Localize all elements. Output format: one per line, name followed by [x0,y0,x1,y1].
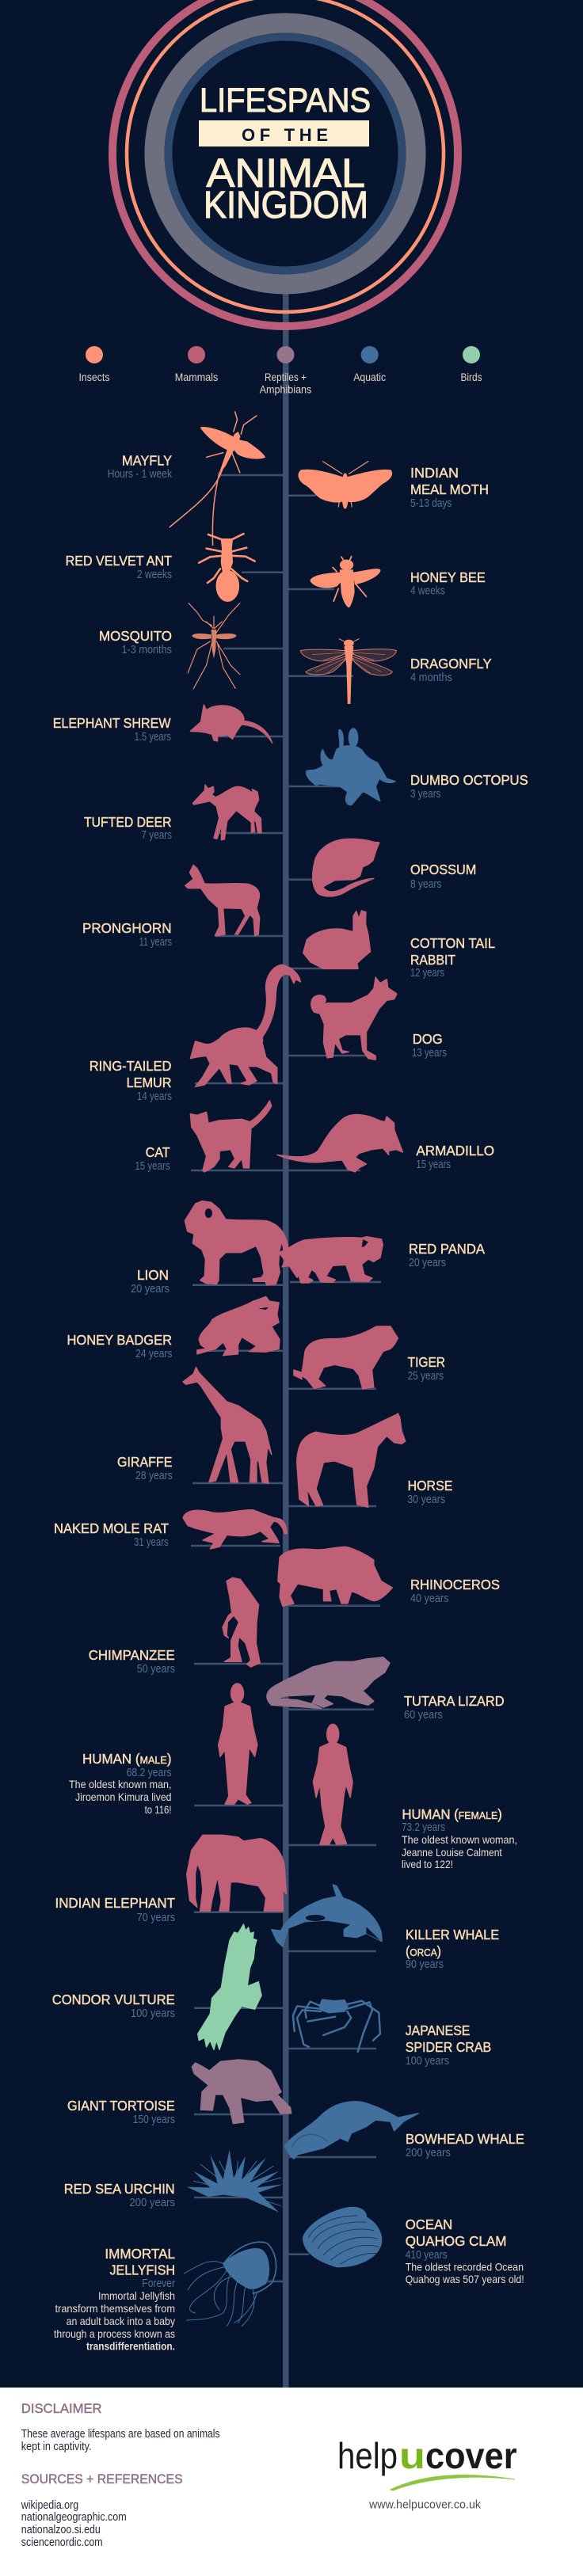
entry: tiger [288,1326,445,1389]
legend: Reptiles + [265,371,307,383]
label: immortal jellyfish: transdifferentiation. [86,2339,175,2352]
icon: honey bee [311,557,380,607]
entry: ring-tailed lemur [90,965,300,1103]
entry: dumbo octopus [288,729,528,805]
label: pronghorn: PRONGHORN [82,920,171,936]
label: ring-tailed lemur: RING-TAILED [90,1058,172,1074]
label: tiger: 25 years [408,1370,444,1383]
label: naked mole rat [54,1520,169,1549]
icon: japanese spider crab [293,2000,380,2052]
label: bowhead whale [406,2131,524,2159]
label: red velvet ant [66,553,172,581]
title: LIFESPANS [200,82,371,120]
label: bowhead whale: 200 years [406,2147,451,2159]
icon: horse [297,1414,406,1507]
label: red sea urchin: 200 years [129,2197,175,2209]
label: human female: 73.2 years [402,1821,445,1834]
label: cotton tail rabbit: RABBIT [410,952,455,968]
entry: mayfly [108,412,284,545]
label: giraffe: GIRAFFE [117,1454,172,1470]
label: ring-tailed lemur: LEMUR [127,1075,171,1090]
legend [79,346,482,396]
label: tutara lizard [404,1693,505,1722]
icon: human male [219,1684,257,1804]
label: tufted deer [84,814,172,842]
label: mosquito [99,628,172,656]
disclaimer: These average lifespans are based on animals [21,2428,219,2441]
label: dog: DOG [413,1031,443,1047]
label: tutara lizard: TUTARA LIZARD [404,1693,505,1709]
icon: pronghorn [185,865,260,936]
label: dragonfly [410,656,492,684]
entry: dog [288,977,447,1060]
icon: cotton tail rabbit [303,911,371,968]
icon: indian meal moth [299,462,391,508]
entry: honey badger [67,1296,284,1360]
legend: Insects [79,371,109,383]
entry: cat [135,1101,284,1173]
label: giant tortoise [67,2098,175,2126]
label: indian meal moth: INDIAN [410,465,459,481]
entry: naked mole rat [54,1510,287,1549]
label: killer whale: KILLER WHALE [406,1927,499,1942]
label: rhinoceros: 40 years [410,1592,448,1605]
entry: mosquito [99,603,284,689]
icon: giraffe [183,1368,272,1483]
label: lion: 20 years [131,1283,170,1296]
label: red panda: 20 years [409,1257,446,1269]
website url: www.helpucover.co.uk [368,2498,481,2512]
label: indian meal moth: MEAL MOTH [410,481,489,497]
entry: horse [288,1414,452,1507]
label: naked mole rat: 31 years [134,1536,169,1549]
label: immortal jellyfish: an adult back into a baby [67,2315,175,2327]
icon: ring-tailed lemur [190,965,300,1086]
icon: chimpanzee [223,1577,260,1667]
label: dumbo octopus: 3 years [410,788,440,801]
icon: giant tortoise [192,2060,292,2124]
logo: helpucover: u [399,2435,425,2476]
label: ocean quahog clam: QUAHOG CLAM [406,2233,506,2249]
label: chimpanzee [89,1647,175,1676]
label: pronghorn: 11 years [139,936,172,949]
icon: killer whale [272,1885,382,1946]
label: rhinoceros [410,1577,500,1605]
label: indian elephant: 70 years [137,1912,175,1924]
label: dragonfly: DRAGONFLY [410,656,492,672]
label: human male: 68.2 years [127,1767,171,1779]
label: immortal jellyfish: IMMORTAL [105,2246,175,2262]
label: tiger: TIGER [408,1354,445,1370]
label: mayfly: Hours - 1 week [108,468,173,481]
title [199,82,371,226]
logo: helpucover [337,2435,517,2490]
label: giant tortoise: GIANT TORTOISE [67,2098,175,2114]
entry: giraffe [117,1368,284,1483]
icon: green swoosh [391,2475,515,2490]
label: chimpanzee: CHIMPANZEE [89,1647,175,1663]
label: horse: 30 years [407,1493,445,1506]
icon: tiger [294,1326,398,1389]
legend: Aquatic [353,371,386,383]
label: human female: The oldest known woman, [402,1833,517,1846]
legend: Mammals [175,371,218,383]
label: immortal jellyfish: JELLYFISH [109,2262,175,2277]
label: opossum [410,862,476,891]
icon: red sea urchin [187,2150,283,2213]
label: human male: HUMAN (MALE) [82,1751,171,1767]
entry: japanese spider crab [288,2000,491,2068]
entry: pronghorn [82,865,284,949]
icon: lion [185,1201,288,1285]
label: horse [407,1478,452,1506]
label: ocean quahog clam: The oldest recorded Ocean [406,2260,524,2273]
icon: naked mole rat [183,1510,287,1549]
label: japanese spider crab [406,2022,491,2068]
label: ring-tailed lemur: 14 years [137,1090,172,1103]
icon: honey badger [197,1296,280,1356]
icon: dumbo octopus [307,729,395,805]
title roundel [112,0,458,326]
label: mayfly [108,453,173,481]
label: pronghorn [82,920,172,949]
label: ocean quahog clam: OCEAN [406,2216,452,2232]
icon: opossum [313,839,379,896]
icon: bowhead whale [284,2102,418,2159]
label: armadillo [416,1143,494,1171]
label: giraffe: 28 years [135,1470,173,1482]
label: armadillo: 15 years [416,1159,451,1171]
label: cotton tail rabbit: COTTON TAIL [410,935,495,951]
label: immortal jellyfish: Forever [142,2277,175,2290]
label: condor vulture: CONDOR VULTURE [52,1992,175,2007]
label: condor vulture [52,1992,175,2020]
label: dumbo octopus: DUMBO OCTOPUS [410,772,528,788]
label: opossum: OPOSSUM [410,862,476,877]
label: dragonfly: 4 months [410,672,452,684]
icon: tufted deer [192,785,261,840]
title: KINGDOM [204,185,368,226]
label: red velvet ant: 2 weeks [137,569,172,581]
label: indian meal moth: 5-13 days [410,497,452,510]
label: killer whale: (ORCA) [406,1943,441,1959]
label: rhinoceros: RHINOCEROS [410,1577,500,1592]
label: human female [402,1806,517,1870]
label: lion: LION [137,1267,169,1283]
entry: indian elephant [55,1835,287,1924]
entry: lion [131,1201,288,1296]
icon: armadillo [277,1115,402,1172]
label: japanese spider crab: SPIDER CRAB [406,2039,491,2055]
entry: elephant shrew [53,705,284,744]
entry: red panda [279,1237,485,1283]
label: red sea urchin: RED SEA URCHIN [64,2181,175,2197]
icon: dragonfly [300,639,396,703]
label: mayfly: MAYFLY [122,453,172,469]
label: dog: 13 years [412,1047,447,1060]
label: immortal jellyfish: Immortal Jellyfish [98,2289,175,2302]
label: ocean quahog clam [406,2216,524,2285]
entry: giant tortoise [67,2060,292,2126]
label: dog [412,1031,447,1060]
label: naked mole rat: NAKED MOLE RAT [54,1520,169,1536]
timeline spine [283,289,288,2388]
label: mosquito: 1-3 months [122,644,172,656]
icon: mayfly [170,412,265,545]
icon: red panda [279,1237,383,1283]
label: cat: CAT [146,1144,170,1160]
icon: condor vulture [198,1924,261,2049]
label: japanese spider crab: 100 years [406,2055,449,2068]
label: red panda: RED PANDA [409,1241,485,1257]
icon: rhinoceros [278,1547,392,1606]
label: tufted deer: TUFTED DEER [84,814,171,830]
label: giraffe [117,1454,173,1482]
label: indian elephant [55,1895,175,1924]
title: ANIMAL [206,150,365,196]
label: chimpanzee: 50 years [137,1663,175,1676]
entry: immortal jellyfish [54,2242,284,2352]
label: tiger [408,1354,445,1383]
entry: human female [288,1724,517,1870]
label: honey badger: HONEY BADGER [67,1332,172,1348]
entry: cotton tail rabbit [288,911,495,980]
entry: bowhead whale [284,2102,524,2159]
entry: tufted deer [84,785,284,842]
disclaimer: kept in captivity. [21,2441,91,2453]
icon: ocean quahog clam [303,2207,382,2267]
legend: Amphibians [260,383,311,396]
sources and references: SOURCES + REFERENCES [21,2471,183,2487]
label: cat [135,1144,170,1173]
disclaimer [21,2401,219,2453]
label: mosquito: MOSQUITO [99,628,172,644]
entry: armadillo [277,1115,494,1172]
label: red velvet ant: RED VELVET ANT [66,553,172,569]
disclaimer: DISCLAIMER [21,2401,102,2416]
entry: dragonfly [288,639,492,703]
icon: human female [313,1724,352,1844]
label: bowhead whale: BOWHEAD WHALE [406,2131,524,2147]
label: human female: lived to 122! [402,1858,453,1870]
label: cotton tail rabbit [410,935,495,980]
entry: tutara lizard [267,1657,505,1722]
label: immortal jellyfish: through a process known as [54,2327,175,2340]
entry: rhinoceros [278,1547,500,1606]
label: horse: HORSE [408,1478,452,1493]
label: ocean quahog clam: Quahog was 507 years old! [406,2273,524,2285]
label: armadillo: ARMADILLO [416,1143,494,1159]
icon: tutara lizard [267,1657,390,1708]
label: human male: Jiroemon Kimura lived [75,1790,171,1803]
title: OF THE [242,125,328,145]
label: tutara lizard: 60 years [404,1709,443,1722]
label: red panda [409,1241,485,1269]
icon: dog [311,977,397,1060]
label: honey bee [410,569,486,598]
label: elephant shrew [53,715,171,744]
label: indian meal moth [410,465,489,510]
label: dumbo octopus [410,772,528,801]
label: red sea urchin [64,2181,175,2209]
label: honey badger: 24 years [135,1348,172,1360]
icon: red velvet ant [199,534,255,601]
entry: chimpanzee [89,1577,284,1676]
icon: elephant shrew [190,705,272,743]
entry: indian meal moth [288,462,489,510]
label: cotton tail rabbit: 12 years [410,967,444,980]
label: opossum: 8 years [410,878,441,891]
entry: human male [69,1684,284,1816]
label: condor vulture: 100 years [131,2007,175,2020]
entry: red sea urchin [64,2150,284,2213]
entry: killer whale [272,1885,499,1971]
entry: condor vulture [52,1924,284,2049]
entry: honey bee [288,557,486,607]
label: japanese spider crab: JAPANESE [406,2022,470,2038]
label: human female: Jeanne Louise Calment [402,1846,502,1859]
legend: Birds [461,371,482,383]
entry: ocean quahog clam [288,2207,524,2285]
icon: immortal jellyfish [184,2242,276,2327]
label: indian elephant: INDIAN ELEPHANT [55,1895,175,1911]
icon: mosquito [188,603,240,689]
label: elephant shrew: ELEPHANT SHREW [53,715,171,731]
label: elephant shrew: 1.5 years [135,731,171,744]
label: human male: to 116! [145,1803,171,1816]
label: human male: The oldest known man, [69,1778,171,1790]
label: ring-tailed lemur [90,1058,172,1103]
label: giant tortoise: 150 years [133,2114,175,2126]
sources and references: sciencenordic.com [21,2536,103,2549]
sources and references: nationalgeographic.com [21,2511,127,2524]
label: tufted deer: 7 years [141,829,172,842]
label: immortal jellyfish: transform themselves from [55,2302,175,2315]
entry: opossum [288,839,476,896]
logo: helpucover: help [337,2435,398,2476]
label: immortal jellyfish [54,2246,175,2352]
label: human male [69,1751,171,1816]
label: honey bee: 4 weeks [410,585,445,598]
logo: helpucover: cover [425,2435,517,2476]
label: lion [131,1267,170,1296]
label: killer whale: 90 years [406,1958,444,1971]
label: honey bee: HONEY BEE [410,569,486,585]
label: honey badger [67,1332,172,1360]
sources and references: nationalzoo.si.edu [21,2524,101,2536]
label: cat: 15 years [135,1160,170,1173]
label: human female: HUMAN (FEMALE) [402,1806,502,1822]
icon: cat [190,1101,272,1172]
entry: red velvet ant [66,534,284,601]
label: ocean quahog clam: 410 years [406,2249,448,2262]
sources and references: wikipedia.org [21,2499,78,2512]
sources and references [21,2471,183,2549]
label: killer whale [406,1927,499,1971]
icon: indian elephant [187,1835,287,1911]
